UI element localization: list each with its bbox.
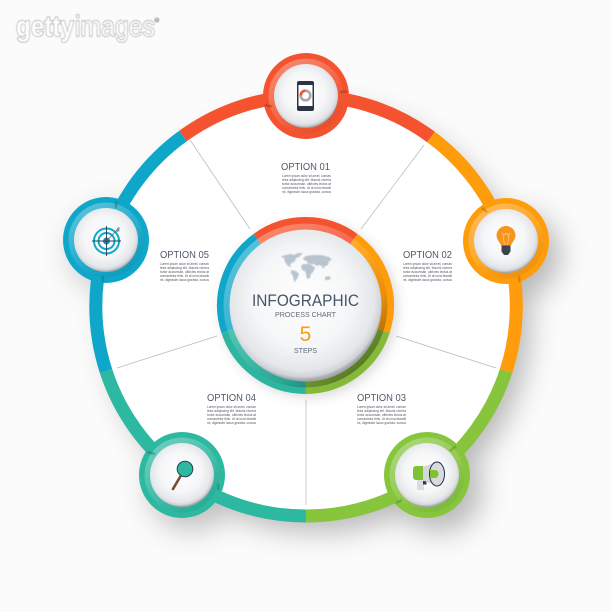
text block: option 01: tetur adipiscing elit. Mauris viverra	[282, 178, 331, 182]
text block: option 02: consectetur felis. Ut at urna blandit	[403, 274, 452, 278]
text block: option 02: Lorem ipsum dolor sit amet, consec	[403, 262, 452, 266]
icon: magnifying glass	[173, 461, 193, 489]
text block: option 05: mi, dignissim lacus gravida, cursus	[160, 278, 209, 282]
text block: option 01: OPTION 01	[281, 162, 330, 173]
logo: gettyimages watermark: images	[75, 11, 155, 43]
text block: option 04: consectetur felis. Ut at urna blandit	[207, 417, 256, 421]
text block: option 05: tetur adipiscing elit. Mauris viverra	[160, 266, 209, 270]
hub disc	[230, 230, 382, 382]
text block: option 03: tetur adipiscing elit. Mauris viverra	[357, 409, 406, 413]
node 2: light bulb	[463, 198, 549, 284]
main white disc	[98, 98, 514, 514]
node 3: megaphone	[384, 432, 470, 518]
hub number: 5	[300, 323, 311, 346]
outer ring	[96, 96, 516, 516]
text block: option 05: OPTION 05	[160, 250, 209, 261]
ring segment: blue	[96, 136, 183, 371]
center hub	[221, 221, 397, 397]
text block: option 03: mi, dignissim lacus gravida, cursus	[357, 421, 406, 425]
logo: gettyimages watermark: ®	[155, 17, 159, 24]
logo: gettyimages watermark	[16, 11, 159, 43]
shadow under main circle	[70, 108, 560, 532]
text block: option 04: OPTION 04	[207, 393, 256, 404]
logo: gettyimages watermark: getty	[16, 11, 74, 43]
text block: option 04	[207, 393, 256, 425]
ring segment: orange	[431, 137, 516, 371]
hub ring	[224, 224, 387, 388]
text block: option 02: mi, dignissim lacus gravida, cursus	[403, 278, 452, 282]
text block: option 02: OPTION 02	[403, 250, 452, 261]
text block: option 03: consectetur felis. Ut at urna blandit	[357, 417, 406, 421]
text block: option 02	[403, 250, 452, 282]
ring segment: green	[306, 371, 506, 516]
node 4: magnifier	[139, 432, 225, 518]
hub subtitle: PROCESS CHART	[275, 310, 336, 319]
text block: option 03	[357, 393, 406, 425]
text block: option 01	[281, 162, 331, 194]
icon: target with dart	[92, 226, 121, 256]
text block: option 01: consectetur felis. Ut at urna blandit	[282, 186, 331, 190]
ring segment: red	[183, 96, 431, 137]
ring segment: teal	[106, 371, 306, 516]
text block: option 05: Lorem ipsum dolor sit amet, consec	[160, 262, 209, 266]
text block: option 05: tortor accumsan, ultricies lectus at	[160, 270, 209, 274]
text block: option 04: tetur adipiscing elit. Mauris viverra	[207, 409, 256, 413]
text block: option 01: tortor accumsan, ultricies lectus at	[282, 182, 331, 186]
hub steps label: STEPS	[294, 346, 317, 355]
world map	[281, 253, 332, 282]
text block: option 03: OPTION 03	[357, 393, 406, 404]
text block: option 04: mi, dignissim lacus gravida, cursus	[207, 421, 256, 425]
text block: option 02: tortor accumsan, ultricies lectus at	[403, 270, 452, 274]
text block: option 05: consectetur felis. Ut at urna blandit	[160, 274, 209, 278]
text block: option 01: Lorem ipsum dolor sit amet, consec	[282, 174, 331, 178]
icon: phone	[297, 81, 314, 111]
text block: option 04: tortor accumsan, ultricies lectus at	[207, 413, 256, 417]
text block: option 02: tetur adipiscing elit. Mauris viverra	[403, 266, 452, 270]
text block: option 03: Lorem ipsum dolor sit amet, consec	[357, 405, 406, 409]
spoke dividers	[117, 140, 496, 505]
text block: option 05	[160, 250, 209, 282]
text block: option 04: Lorem ipsum dolor sit amet, consec	[207, 405, 256, 409]
hub title: INFOGRAPHIC	[252, 292, 359, 310]
text block: option 03: tortor accumsan, ultricies lectus at	[357, 413, 406, 417]
icon: megaphone	[413, 462, 444, 490]
icon: light bulb	[496, 226, 516, 255]
node 5: target	[63, 197, 149, 283]
node 1: phone	[263, 53, 349, 139]
hub shadow	[221, 221, 397, 397]
text block: option 01: mi, dignissim lacus gravida, cursus	[282, 190, 331, 194]
hub inner highlight ring	[226, 226, 384, 384]
